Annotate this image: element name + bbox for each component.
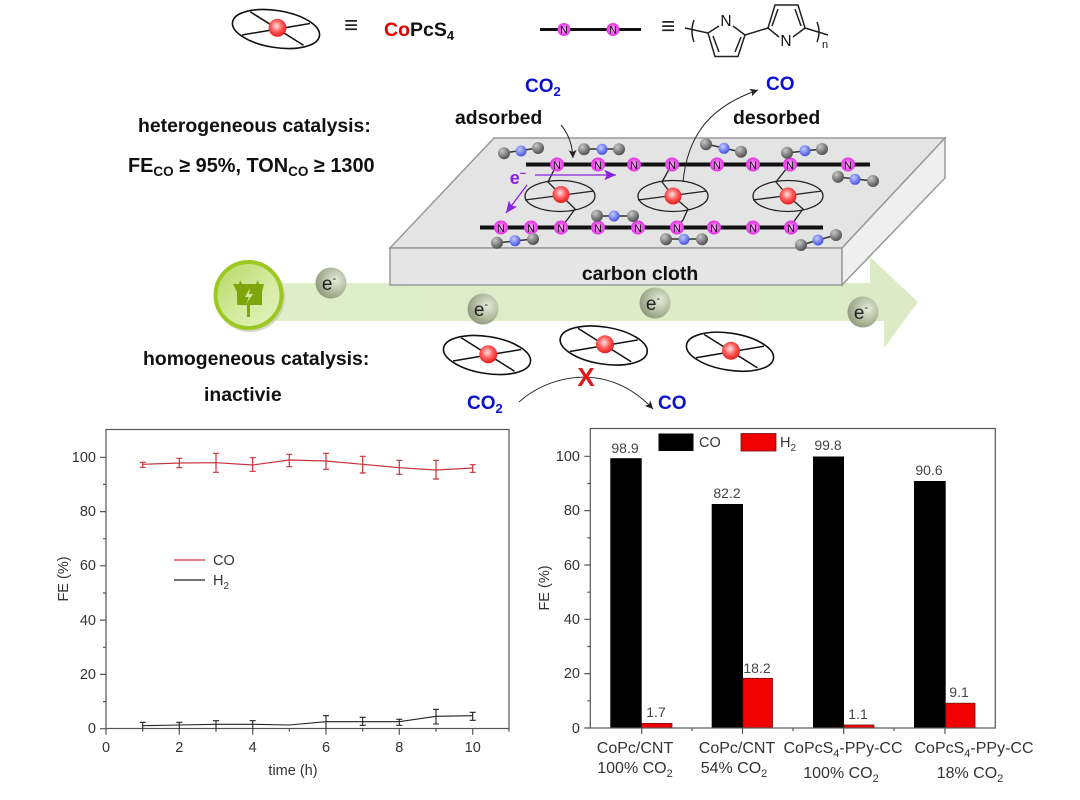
label: CO homogeneous: CO bbox=[658, 393, 686, 414]
electron balls: - bbox=[332, 273, 336, 285]
electron balls: e bbox=[646, 294, 656, 315]
y tick labels: 20 bbox=[80, 667, 96, 683]
top polymer chain: N bbox=[630, 160, 638, 172]
category labels: 2 bbox=[761, 768, 767, 780]
value labels: 1.1 bbox=[848, 706, 868, 722]
linkers bbox=[548, 164, 803, 227]
text: inactive: inactivie bbox=[204, 384, 282, 406]
bottom polymer chain bbox=[480, 220, 823, 235]
value labels: 18.2 bbox=[743, 660, 771, 676]
y tick labels: 40 bbox=[564, 612, 580, 628]
y tick labels bbox=[556, 449, 580, 737]
value labels: 90.6 bbox=[915, 462, 943, 478]
cobalt centres bbox=[552, 186, 796, 204]
category labels: 4 bbox=[833, 748, 839, 760]
labels: adsorbed and desorbed: CO bbox=[766, 74, 794, 95]
bottom polymer chain: N bbox=[749, 223, 757, 235]
bottom polymer chain: N bbox=[527, 223, 535, 235]
arrow: CO desorption bbox=[683, 90, 758, 182]
electron balls bbox=[316, 268, 878, 328]
x tick labels: 2 bbox=[175, 740, 183, 756]
equivalence sign: ≡ bbox=[344, 12, 358, 39]
icon: CoPcS4 disc bbox=[230, 4, 322, 54]
legend: 2 bbox=[223, 581, 229, 592]
electron label and transfer arrows bbox=[506, 168, 616, 213]
label: CO2 homogeneous: CO bbox=[467, 393, 496, 414]
top polymer chain: N bbox=[713, 160, 721, 172]
icon: red cross: X bbox=[577, 362, 595, 392]
legend: CO bbox=[699, 435, 721, 451]
label: CoPcS4: 4 bbox=[447, 28, 455, 43]
category labels: CoPc/CNT bbox=[699, 740, 775, 757]
value labels: 9.1 bbox=[949, 684, 969, 700]
y tick labels: 60 bbox=[564, 558, 580, 574]
icon: chain with N atoms: N bbox=[560, 24, 568, 36]
top polymer chain: N bbox=[844, 160, 852, 172]
chart: FE comparison bars bbox=[537, 428, 1034, 785]
legend: CoPcS4 symbol bbox=[230, 4, 455, 54]
icon: power source bbox=[215, 262, 285, 332]
category labels: 2 bbox=[997, 773, 1003, 785]
top polymer chain: N bbox=[594, 160, 602, 172]
category labels: 100% CO bbox=[597, 760, 667, 777]
label: carbon cloth: carbon cloth bbox=[582, 263, 698, 285]
bottom polymer chain: N bbox=[634, 223, 642, 235]
legend: H bbox=[213, 573, 223, 589]
discs bbox=[525, 180, 823, 212]
icon: chain with N atoms bbox=[540, 23, 641, 36]
value labels: 1.7 bbox=[646, 704, 666, 720]
polypyrrole structure: N bbox=[780, 33, 792, 50]
legend: H bbox=[780, 435, 790, 451]
y tick labels: 40 bbox=[80, 613, 96, 629]
labels: adsorbed and desorbed bbox=[455, 74, 820, 129]
label: CO2 homogeneous: 2 bbox=[496, 401, 503, 416]
arrow: CO2 adsorption bbox=[561, 125, 573, 158]
top polymer chain: N bbox=[749, 160, 757, 172]
homogeneous discs bbox=[441, 320, 776, 380]
electron balls: - bbox=[484, 299, 488, 311]
bottom polymer chain: N bbox=[787, 223, 795, 235]
category labels: 2 bbox=[873, 773, 879, 785]
value labels: 82.2 bbox=[713, 485, 741, 501]
y tick labels: 80 bbox=[564, 503, 580, 519]
axis title: FE: FE (%) bbox=[537, 565, 553, 611]
top polymer chain bbox=[526, 158, 870, 172]
x tick labels: 6 bbox=[322, 740, 330, 756]
bottom polymer chain: N bbox=[673, 223, 681, 235]
axis title: time: time (h) bbox=[268, 763, 318, 779]
bars CO bbox=[610, 456, 946, 728]
y tick labels: 0 bbox=[572, 721, 580, 737]
electron balls: - bbox=[656, 293, 660, 305]
y tick labels: 100 bbox=[72, 450, 96, 466]
value labels: 99.8 bbox=[814, 437, 842, 453]
polypyrrole structure: n bbox=[822, 39, 828, 51]
series: CO bbox=[140, 453, 476, 479]
panel: carbon cloth slab bbox=[390, 138, 945, 285]
y tick labels: 80 bbox=[80, 504, 96, 520]
y tick labels: 60 bbox=[80, 558, 96, 574]
text: FE and TON values: ≥ 1300 bbox=[308, 155, 375, 177]
top polymer chain: N bbox=[786, 160, 794, 172]
labels: adsorbed and desorbed: CO bbox=[525, 76, 554, 97]
electron balls: - bbox=[864, 302, 868, 314]
top polymer chain: N bbox=[553, 160, 561, 172]
bottom polymer chain: N bbox=[497, 223, 505, 235]
arrow: electron flow band bbox=[270, 257, 918, 348]
text: FE and TON values: CO bbox=[288, 164, 308, 179]
y tick labels bbox=[72, 450, 96, 737]
x tick labels: 0 bbox=[102, 740, 110, 756]
chart: FE vs time bbox=[56, 430, 509, 779]
polypyrrole structure: N bbox=[720, 13, 732, 30]
axes bbox=[100, 430, 509, 735]
CO2 molecules bbox=[491, 138, 879, 251]
top polymer chain: N bbox=[668, 160, 676, 172]
text: FE and TON values: FE bbox=[128, 155, 153, 177]
legend: CO bbox=[213, 553, 235, 569]
category labels: 54% CO bbox=[701, 760, 761, 777]
polypyrrole structure bbox=[685, 5, 828, 56]
category labels: 2 bbox=[667, 768, 673, 780]
text: FE and TON values: CO bbox=[153, 164, 174, 179]
arrow: blocked CO2 reduction bbox=[519, 377, 653, 409]
value labels: 98.9 bbox=[611, 440, 639, 456]
legend: polypyrrole symbol bbox=[540, 5, 828, 56]
text: heterogeneous catalysis: heterogeneous catalysis: bbox=[138, 115, 371, 137]
label: CoPcS4: CoPcS bbox=[384, 19, 447, 41]
bars H2 bbox=[642, 678, 975, 728]
legend bbox=[174, 553, 235, 592]
category labels: 18% CO bbox=[937, 765, 997, 782]
electron label and transfer arrows: − bbox=[520, 168, 526, 180]
legend bbox=[658, 434, 796, 454]
y tick labels: 0 bbox=[88, 721, 96, 737]
category labels bbox=[597, 740, 1034, 785]
category labels: CoPcS bbox=[914, 740, 964, 757]
text: homogeneous catalysis: homogeneous catalysis: bbox=[143, 348, 369, 370]
bottom polymer chain: N bbox=[594, 223, 602, 235]
equivalence sign: ≡ bbox=[661, 13, 675, 40]
labels: adsorbed and desorbed: adsorbed bbox=[455, 107, 542, 129]
electron balls: e bbox=[854, 303, 864, 324]
icon: chain with N atoms: N bbox=[609, 24, 617, 36]
x tick labels: 10 bbox=[465, 740, 481, 756]
category labels: 4 bbox=[964, 748, 970, 760]
category labels: -PPy-CC bbox=[839, 740, 903, 757]
x tick labels bbox=[102, 740, 481, 756]
axis title: FE: FE (%) bbox=[56, 556, 72, 602]
legend: 2 bbox=[790, 443, 796, 454]
category labels: 100% CO bbox=[803, 765, 873, 782]
electron balls: e bbox=[322, 274, 332, 295]
category labels: CoPc/CNT bbox=[597, 740, 673, 757]
x tick labels: 8 bbox=[395, 740, 403, 756]
surface catalyst assembly bbox=[480, 90, 879, 251]
labels: adsorbed and desorbed: 2 bbox=[554, 84, 561, 99]
x tick labels: 4 bbox=[249, 740, 257, 756]
y tick labels: 20 bbox=[564, 666, 580, 682]
electron balls: e bbox=[474, 300, 484, 321]
y tick labels: 100 bbox=[556, 449, 580, 465]
labels: adsorbed and desorbed: desorbed bbox=[733, 107, 820, 129]
category labels: CoPcS bbox=[783, 740, 833, 757]
axes bbox=[584, 428, 995, 734]
bottom polymer chain: N bbox=[557, 223, 565, 235]
category labels: -PPy-CC bbox=[970, 740, 1034, 757]
series: H2 bbox=[140, 709, 476, 729]
electron label and transfer arrows: e bbox=[510, 168, 520, 188]
text: FE and TON values: ≥ 95%, TON bbox=[174, 155, 288, 177]
bottom polymer chain: N bbox=[710, 223, 718, 235]
value labels bbox=[611, 437, 969, 722]
